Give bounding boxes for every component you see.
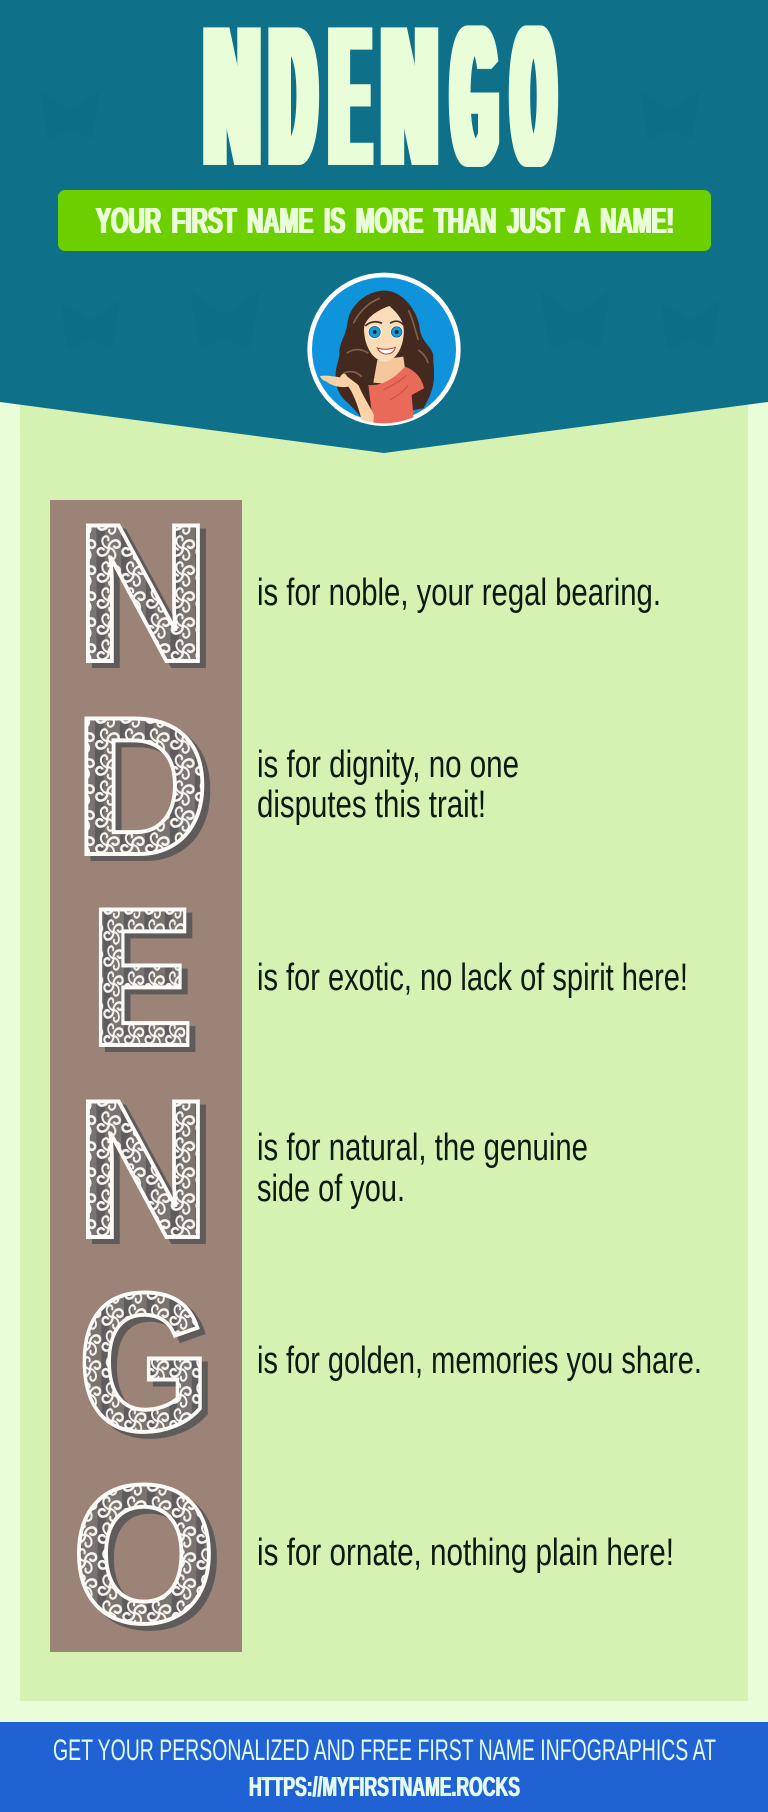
letter G: G bbox=[77, 1253, 211, 1473]
letter column bbox=[50, 500, 242, 1652]
letter N: N bbox=[81, 1064, 217, 1284]
footer url: HTTPS://MYFIRSTNAME.ROCKS bbox=[249, 1771, 520, 1802]
text: N line: is for noble, your regal bearing. bbox=[257, 572, 661, 614]
text: D lines: disputes this trait! bbox=[257, 784, 486, 826]
title bbox=[205, 0, 553, 209]
text: N lines: side of you. bbox=[257, 1168, 405, 1210]
letter O: O bbox=[77, 1449, 223, 1669]
content panel bbox=[20, 380, 748, 1701]
text: D lines: is for dignity, no one bbox=[257, 744, 519, 786]
letter E: E bbox=[96, 871, 200, 1092]
header band bbox=[0, 0, 768, 453]
letter G: G bbox=[83, 1258, 217, 1478]
banner background bbox=[58, 190, 711, 251]
letter D: D bbox=[74, 675, 210, 896]
letter D: D bbox=[80, 680, 216, 901]
footer background bbox=[0, 1722, 768, 1812]
letter N: N bbox=[75, 483, 211, 703]
footer band bbox=[0, 1722, 768, 1812]
tagline banner bbox=[58, 190, 711, 251]
text: N lines: is for natural, the genuine bbox=[257, 1127, 588, 1169]
letter O: O bbox=[71, 1444, 217, 1664]
letter N: N bbox=[81, 488, 217, 708]
letter N: N bbox=[75, 1059, 211, 1279]
text: D lines bbox=[257, 744, 519, 826]
text: N lines bbox=[257, 1127, 588, 1210]
letter E: E bbox=[90, 866, 194, 1087]
avatar: woman in circle bbox=[307, 273, 461, 426]
